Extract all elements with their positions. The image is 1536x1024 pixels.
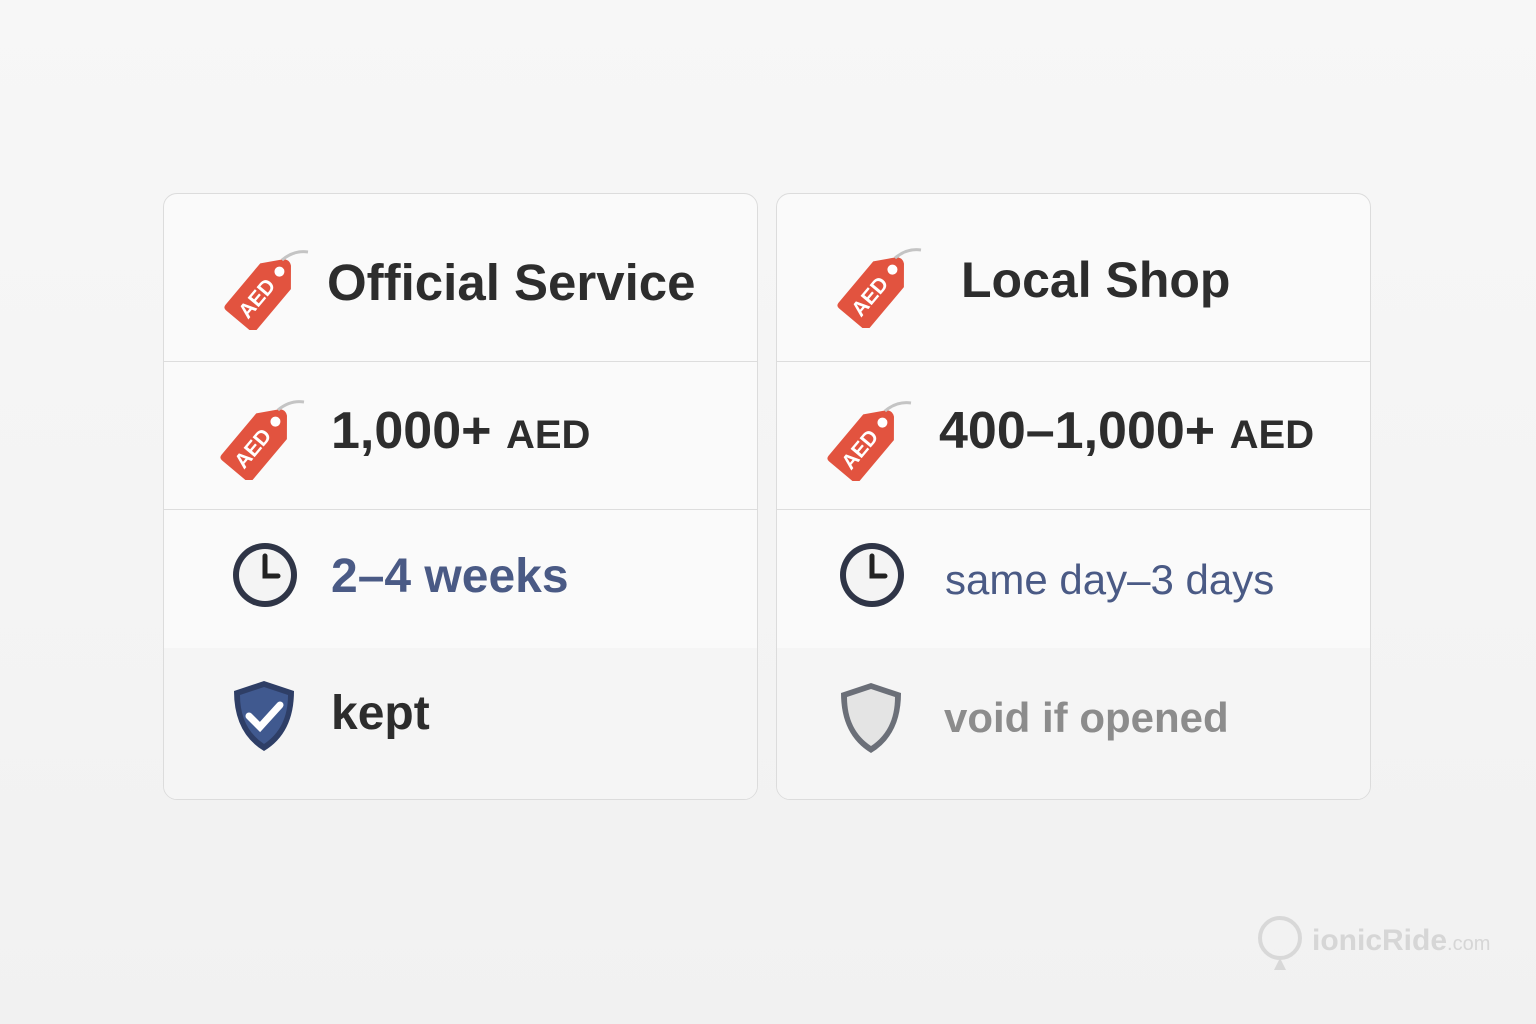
header row: [164, 194, 757, 362]
price text: 1,000+ AED: [331, 402, 590, 460]
icon: AED price tag: [224, 250, 308, 330]
heading: Official Service: [327, 254, 696, 311]
time text: same day–3 days: [945, 556, 1274, 603]
warranty text: void if opened: [944, 694, 1229, 741]
time row: [777, 509, 1370, 649]
warranty row: [777, 648, 1370, 801]
time text: 2–4 weeks: [331, 550, 569, 603]
icon: clock: [233, 543, 297, 607]
icon: AED price tag: [827, 401, 912, 481]
watermark logo: ionicRide.com: [1312, 924, 1490, 957]
time row: [164, 509, 757, 649]
icon: AED price tag: [837, 248, 922, 328]
icon: AED price tag: AED: [837, 425, 883, 474]
icon: AED price tag: AED: [230, 424, 276, 473]
icon: AED price tag: AED: [847, 272, 893, 321]
price row: [777, 361, 1370, 510]
icon: shield with check: [234, 681, 294, 751]
panel: local shop: [776, 193, 1371, 800]
price row: [164, 361, 757, 510]
panel: official service: [163, 193, 758, 800]
price text: 400–1,000+ AED: [939, 402, 1314, 460]
warranty row: [164, 648, 757, 801]
heading: Local Shop: [961, 252, 1230, 308]
header row: [777, 194, 1370, 362]
icon: clock: [840, 543, 904, 607]
icon: AED price tag: AED: [234, 274, 280, 323]
icon: empty shield: [841, 683, 901, 753]
warranty text: kept: [331, 687, 430, 740]
watermark logo: [1258, 916, 1490, 970]
icon: AED price tag: [220, 400, 304, 480]
